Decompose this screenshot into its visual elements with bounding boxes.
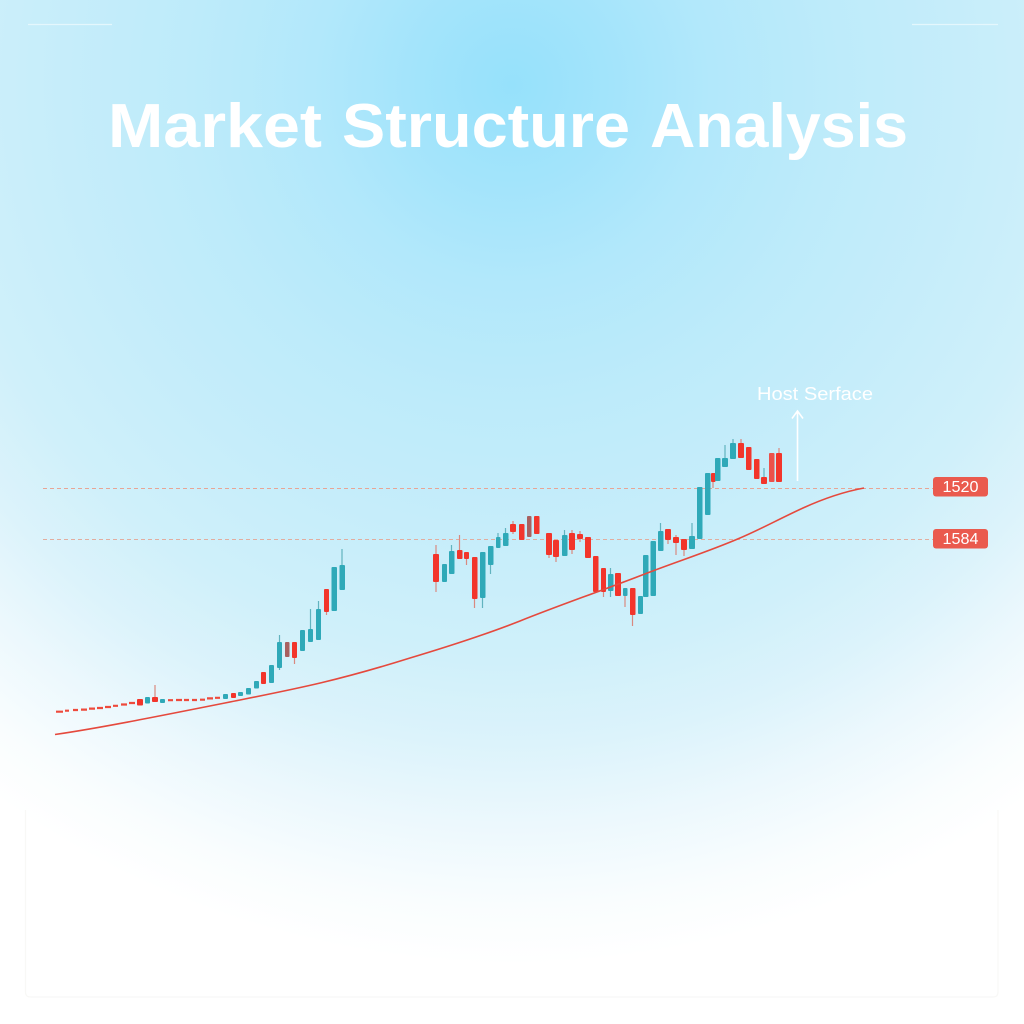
support dashed line 1584 <box>43 538 933 540</box>
annotation label: Host Serface <box>757 384 873 404</box>
moving average trend line <box>55 488 864 734</box>
candles: first rally <box>223 549 345 699</box>
candlestick chart <box>56 439 782 712</box>
price tag 1584 <box>933 529 988 548</box>
candles: final rally <box>623 439 782 626</box>
annotation arrow <box>792 411 803 481</box>
annotation: Host Serface <box>757 384 873 481</box>
resistance dashed line 1520 <box>43 488 933 490</box>
candles: middle range <box>433 516 621 608</box>
title <box>108 92 908 161</box>
title: Structure <box>342 92 630 161</box>
candles: flat dashed start <box>56 685 220 712</box>
title: Market <box>108 92 322 161</box>
title: Analysis <box>650 92 908 161</box>
price tag 1520: 1520 <box>942 479 979 496</box>
price tag 1520 <box>933 477 988 496</box>
price tag 1584: 1584 <box>942 531 979 548</box>
